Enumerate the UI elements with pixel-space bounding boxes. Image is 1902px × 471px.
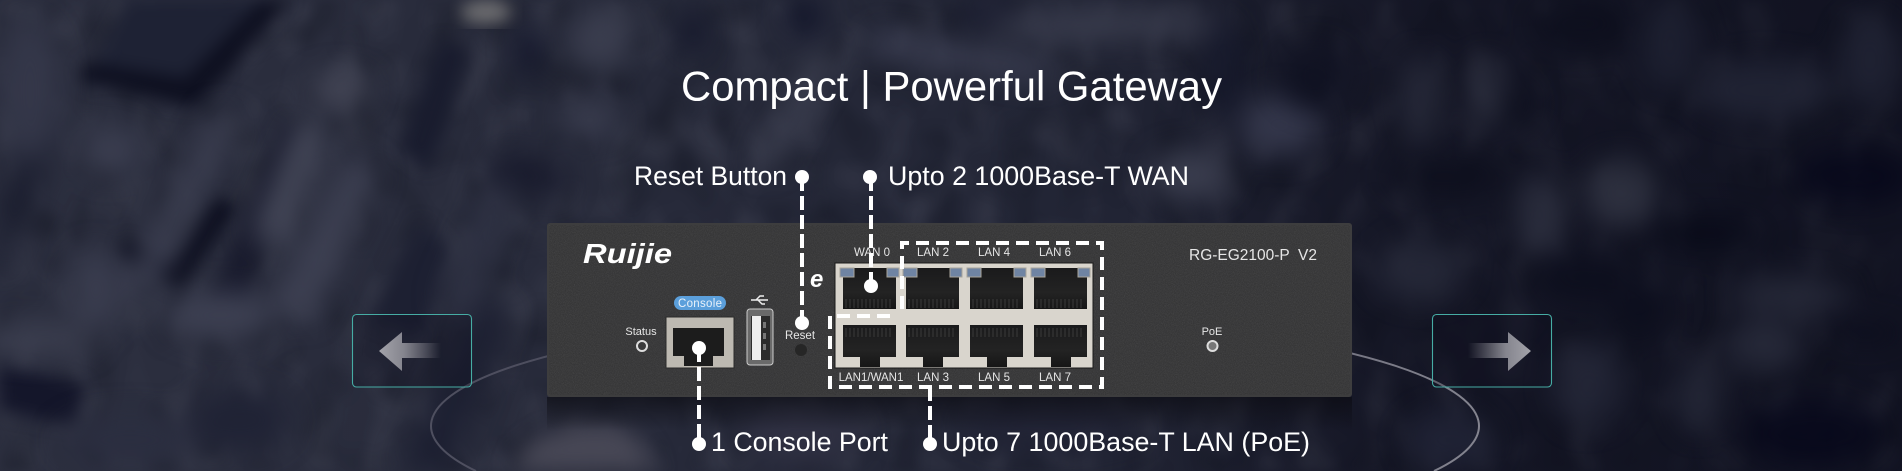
port labels: WAN 0 — [854, 247, 890, 259]
port labels: LAN 6 — [1039, 247, 1071, 259]
port labels: LAN 4 — [978, 247, 1011, 259]
callout: console port — [692, 341, 888, 457]
callout: reset button — [634, 161, 809, 330]
port labels: LAN1/WAN1 — [839, 372, 903, 384]
port labels: LAN 3 — [917, 372, 949, 384]
decorative ring behind device — [431, 315, 1479, 471]
gateway device — [547, 223, 1352, 397]
reset button: Reset — [785, 330, 816, 342]
callout: LAN ports — [830, 243, 1310, 457]
e mark: e — [810, 266, 823, 293]
console port: Console — [678, 298, 722, 310]
status indicator — [625, 326, 657, 351]
port labels: LAN 7 — [1039, 372, 1071, 384]
callout: LAN ports: Upto 7 1000Base-T LAN (PoE) — [942, 427, 1310, 457]
PoE indicator: PoE — [1202, 326, 1222, 338]
right arrow button — [1432, 314, 1552, 387]
port labels — [839, 247, 1071, 384]
model name: RG-EG2100-P V2 — [1189, 247, 1317, 264]
port labels: LAN 5 — [978, 372, 1010, 384]
callout: WAN ports — [863, 161, 1189, 293]
port labels: LAN 2 — [917, 247, 949, 259]
PoE indicator — [1202, 326, 1222, 351]
reset button — [785, 330, 816, 356]
logo: Ruijie: Ruijie — [583, 238, 672, 269]
callout: WAN ports: Upto 2 1000Base-T WAN — [888, 161, 1189, 191]
callout: reset button: Reset Button — [634, 161, 787, 191]
callout: console port: 1 Console Port — [711, 427, 888, 457]
title: Compact | Powerful Gateway — [681, 62, 1222, 110]
device chassis — [547, 223, 1352, 397]
status indicator: Status — [625, 326, 657, 338]
USB port — [747, 296, 773, 365]
left arrow button — [352, 314, 472, 387]
Ethernet port block — [835, 263, 1093, 368]
console port — [666, 296, 734, 368]
